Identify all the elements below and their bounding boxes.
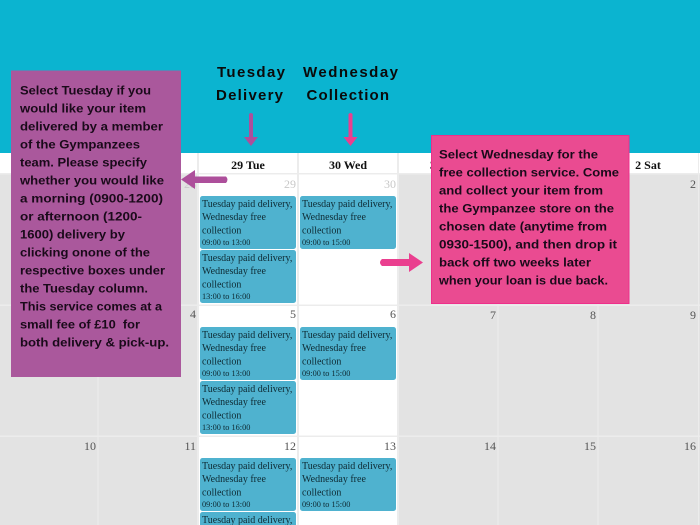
- panel: Tuesday delivery callout: respective boxes under: [20, 264, 165, 278]
- event: Wednesday 13: 09:00 to 15:00: [302, 500, 350, 509]
- event: Tuesday 5 afternoon: Tuesday paid delivery,: [202, 384, 292, 395]
- event: Wednesday 30: 09:00 to 15:00: [302, 238, 350, 247]
- event: Tuesday 29 afternoon: Wednesday free: [202, 266, 266, 277]
- event: Wednesday 6: Tuesday paid delivery,: [302, 330, 392, 341]
- event: Tuesday 5 morning: [200, 327, 296, 380]
- panel: Wednesday collection callout: when your loan is due back.: [438, 274, 608, 288]
- heading: Tuesday Delivery: [216, 64, 286, 104]
- event: Wednesday 30: Tuesday paid delivery,: [302, 199, 392, 210]
- event: Tuesday 5 afternoon: Wednesday free: [202, 397, 266, 408]
- day headers: [231, 158, 661, 172]
- event: Tuesday 12 morning: 09:00 to 13:00: [202, 500, 250, 509]
- date numbers: 11: [184, 439, 196, 453]
- event: Tuesday 29 morning: collection: [202, 226, 241, 236]
- panel: Tuesday delivery callout: both delivery & pick-up.: [20, 336, 169, 350]
- arrow: down to Tuesday column: [244, 113, 258, 146]
- panel: Tuesday delivery callout: or afternoon (1200-: [20, 210, 142, 224]
- day headers: 29 Tue: [231, 158, 266, 172]
- panel: Wednesday collection callout: free collection service. Come: [439, 166, 619, 180]
- heading: Tuesday Delivery: Delivery: [216, 87, 284, 104]
- event: Wednesday 6: [300, 327, 396, 380]
- date numbers: 30: [384, 177, 396, 191]
- panel: Tuesday delivery callout: team. Please specify: [20, 156, 147, 170]
- panel: Tuesday delivery callout: 1600) delivery by: [20, 228, 125, 242]
- date numbers: 6: [390, 307, 396, 321]
- panel: Wednesday collection callout: and collect your item from: [439, 184, 603, 198]
- event: Wednesday 6: collection: [302, 356, 341, 368]
- panel: Tuesday delivery callout: delivered by a member: [20, 120, 163, 134]
- panel: Tuesday delivery callout: small fee of £10 for: [20, 318, 140, 332]
- heading: Wednesday Collection: Wednesday: [303, 64, 399, 81]
- event: Tuesday 29 morning: Tuesday paid delivery,: [202, 199, 292, 210]
- event: Wednesday 13: Tuesday paid delivery,: [302, 461, 392, 472]
- event: Wednesday 13: collection: [302, 488, 341, 498]
- panel: Tuesday delivery callout: of the Gympanzees: [20, 138, 140, 152]
- panel: Wednesday collection callout: chosen date (anytime from: [439, 220, 607, 234]
- event: Tuesday 29 afternoon: collection: [202, 280, 241, 290]
- event: Wednesday 30: Wednesday free: [302, 212, 366, 223]
- event: Wednesday 30: [300, 196, 396, 249]
- heading: Wednesday Collection: Collection: [306, 87, 389, 104]
- date numbers: [84, 177, 696, 453]
- date numbers: 5: [290, 307, 296, 321]
- heading: Wednesday Collection: [303, 64, 399, 104]
- panel: Tuesday delivery callout: the Tuesday column.: [20, 282, 148, 296]
- panel: Tuesday delivery callout: would like your item: [19, 102, 146, 116]
- date numbers: 14: [484, 439, 496, 453]
- event: Wednesday 6: 09:00 to 15:00: [302, 369, 350, 378]
- event: Tuesday 29 morning: 09:00 to 13:00: [202, 238, 250, 247]
- event: Tuesday 12 morning: Tuesday paid delivery,: [202, 461, 292, 472]
- date numbers: 29: [284, 177, 296, 191]
- panel: Tuesday delivery callout: clicking onone of the: [20, 246, 150, 260]
- date numbers: 10: [84, 439, 96, 453]
- event: Tuesday 12 morning: Wednesday free: [202, 474, 266, 485]
- event: Tuesday 5 morning: Tuesday paid delivery,: [202, 330, 292, 341]
- event: Wednesday 13: Wednesday free: [302, 474, 366, 485]
- date numbers: 13: [384, 439, 396, 453]
- event: Wednesday 6: Wednesday free: [302, 343, 366, 354]
- date numbers: 7: [490, 308, 496, 322]
- event: Tuesday 29 morning: Wednesday free: [202, 212, 266, 223]
- panel: Wednesday collection callout: 0930-1500), and then drop it: [439, 238, 617, 252]
- panel: Tuesday delivery callout: [11, 70, 181, 377]
- date numbers: 15: [584, 439, 596, 453]
- event: Wednesday 30: collection: [302, 226, 341, 236]
- event: Tuesday 5 afternoon: collection: [202, 410, 241, 422]
- panel: Tuesday delivery callout: Select Tuesday if you: [20, 84, 151, 98]
- arrow: right to pink callout: [380, 253, 423, 272]
- day headers: 30 Wed: [329, 158, 367, 172]
- date numbers: 8: [590, 308, 596, 322]
- event: Tuesday 5 morning: Wednesday free: [202, 343, 266, 354]
- event: Wednesday 13: [300, 458, 396, 511]
- teal header band: [0, 0, 700, 153]
- event: Tuesday 12 morning: [200, 458, 296, 511]
- event: Tuesday 5 afternoon: 13:00 to 16:00: [202, 423, 250, 432]
- event: Tuesday 29 morning: [200, 196, 296, 249]
- panel: Wednesday collection callout: Select Wednesday for the: [439, 148, 598, 162]
- event: Tuesday 29 afternoon: [200, 250, 296, 303]
- date numbers: 4: [190, 307, 196, 321]
- calendar grid: [0, 153, 700, 525]
- panel: Wednesday collection callout: back off two weeks later: [439, 256, 591, 270]
- heading: Tuesday Delivery: Tuesday: [217, 64, 286, 81]
- event: Tuesday 5 morning: 09:00 to 13:00: [202, 369, 250, 378]
- panel: Wednesday collection callout: the Gympanzee store on the: [439, 202, 614, 216]
- event: Tuesday 5 morning: collection: [202, 356, 241, 368]
- day headers: 2 Sat: [635, 158, 661, 172]
- date numbers: 28: [184, 177, 196, 191]
- event: Tuesday 29 afternoon: 13:00 to 16:00: [202, 292, 250, 301]
- event: Tuesday 29 afternoon: Tuesday paid delivery,: [202, 253, 292, 264]
- date numbers: 12: [284, 439, 296, 453]
- panel: Tuesday delivery callout: whether you would like: [19, 174, 164, 188]
- date numbers: 2: [690, 177, 696, 191]
- date numbers: 16: [684, 439, 696, 453]
- event: Tuesday 5 afternoon: [200, 381, 296, 434]
- event: Tuesday 12 morning: collection: [202, 488, 241, 498]
- panel: Tuesday delivery callout: a morning (0900-1200): [20, 192, 163, 206]
- panel: Tuesday delivery callout: This service comes at a: [20, 300, 162, 314]
- panel: Wednesday collection callout: [432, 136, 629, 304]
- arrow: left to purple callout: [181, 170, 228, 189]
- date numbers: 9: [690, 308, 696, 322]
- arrow: down to Wednesday column: [344, 113, 358, 146]
- day headers: 31 Thu: [430, 158, 466, 172]
